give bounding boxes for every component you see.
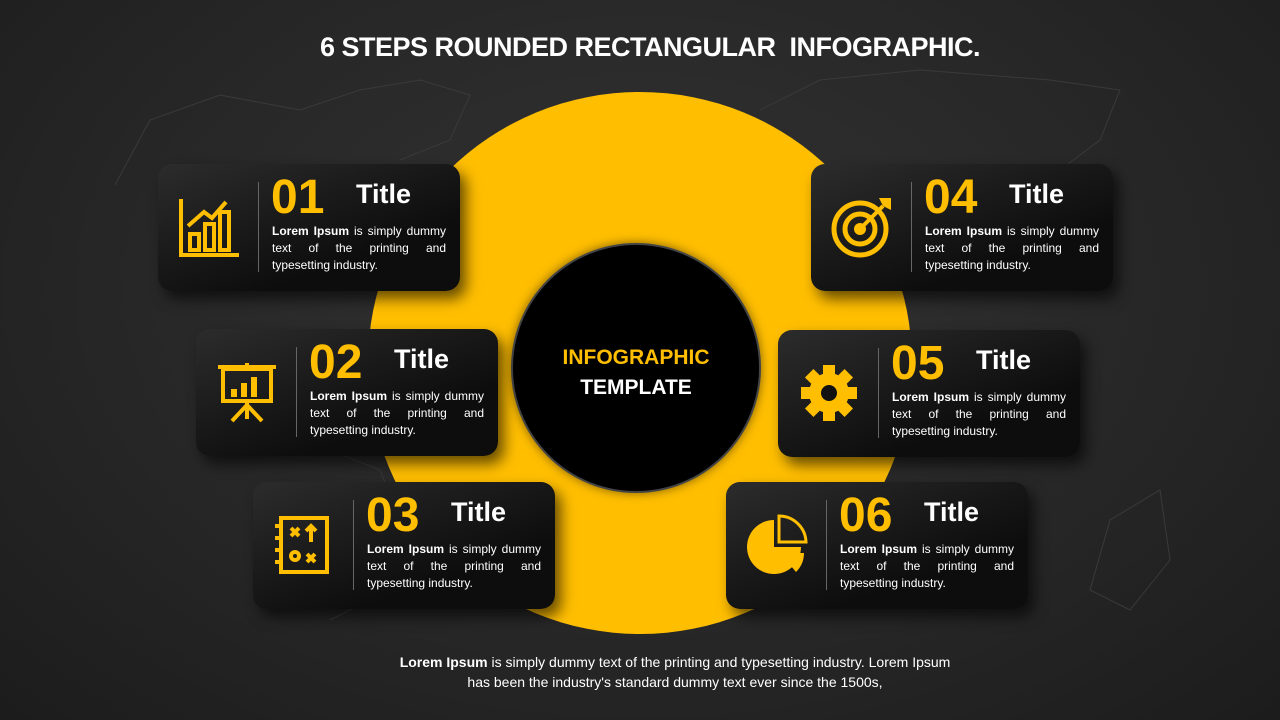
icon: bar chart (179, 199, 239, 257)
card 03: Lorem Ipsum is simply dummy text of the printing and typesetting industry. (367, 542, 541, 590)
card 04 (811, 164, 1113, 291)
card 04: Title (1009, 179, 1064, 209)
footer text (400, 654, 950, 690)
card 02: 02 (309, 336, 362, 389)
center circle: INFOGRAPHIC (562, 346, 710, 369)
card 01: Title (356, 179, 411, 209)
card 01: 01 (271, 171, 324, 224)
footer text: Lorem Ipsum is simply dummy text of the printing and typesetting industry. Lorem Ipsum (400, 654, 950, 670)
card 04: 04 (924, 171, 977, 224)
icon: presentation board (218, 363, 276, 422)
card 06: 06 (839, 489, 892, 542)
center circle (511, 243, 761, 493)
card 01: Lorem Ipsum is simply dummy text of the printing and typesetting industry. (272, 224, 446, 272)
yellow circle (368, 92, 912, 634)
title: 6 STEPS ROUNDED RECTANGULAR INFOGRAPHIC. (320, 32, 980, 62)
card 03: Title (451, 497, 506, 527)
card 06: Title (924, 497, 979, 527)
card 03: 03 (366, 489, 419, 542)
card 06 (726, 482, 1028, 609)
card 03 (253, 482, 555, 609)
card 02: Lorem Ipsum is simply dummy text of the printing and typesetting industry. (310, 389, 484, 437)
card 02: Title (394, 344, 449, 374)
card 02 (196, 329, 498, 456)
card 04: Lorem Ipsum is simply dummy text of the printing and typesetting industry. (925, 224, 1099, 272)
card 01 (158, 164, 460, 291)
icon: gear (801, 365, 857, 421)
footer text: has been the industry's standard dummy text ever since the 1500s, (467, 674, 883, 690)
center circle: TEMPLATE (580, 376, 692, 399)
card 05: Title (976, 345, 1031, 375)
icon: strategy board (275, 516, 329, 574)
card 06: Lorem Ipsum is simply dummy text of the printing and typesetting industry. (840, 542, 1014, 590)
card 05: 05 (891, 337, 944, 390)
icon: pie chart (747, 514, 808, 574)
icon: target (832, 198, 891, 258)
card 05: Lorem Ipsum is simply dummy text of the printing and typesetting industry. (892, 390, 1066, 438)
card 05 (778, 330, 1080, 457)
